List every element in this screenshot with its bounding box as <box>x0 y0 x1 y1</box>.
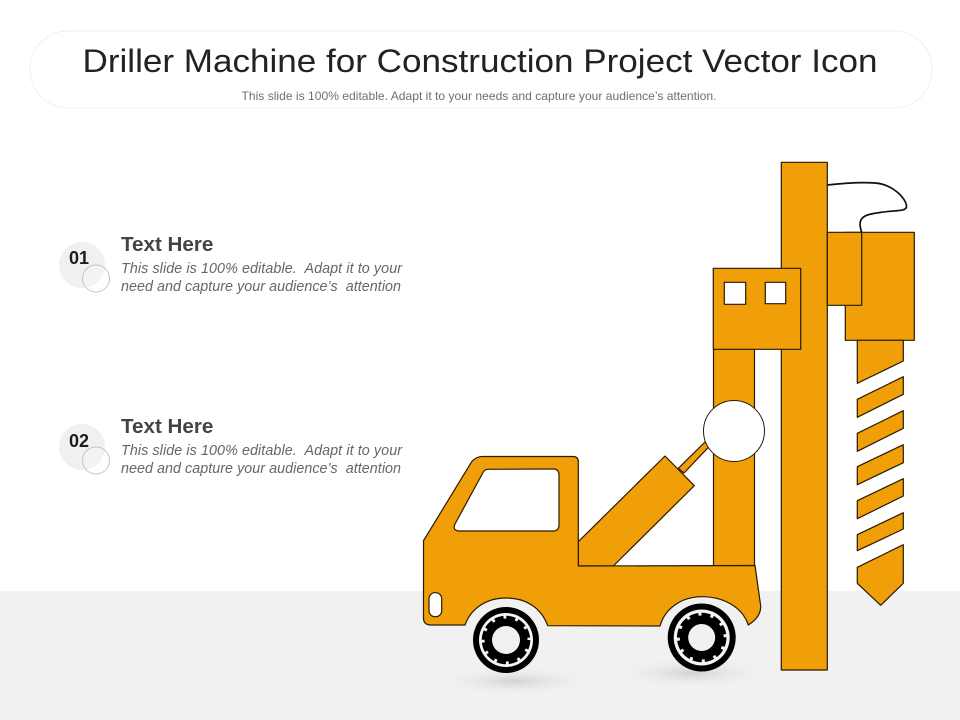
wheel shadows <box>433 657 772 696</box>
motor clamp <box>827 232 862 305</box>
tall mast <box>781 162 827 670</box>
cab window <box>454 469 559 531</box>
number badge 02 <box>59 424 110 474</box>
list item 01 <box>59 233 403 295</box>
number badge 01: 01 <box>69 248 89 268</box>
drill bit <box>857 340 903 605</box>
ground band <box>0 591 960 720</box>
title: Driller Machine for Construction Project Vector Icon <box>82 43 878 79</box>
heading 02: Text Here <box>121 415 213 438</box>
subtitle: This slide is 100% editable. Adapt it to your needs and capture your audience’s attention. <box>242 89 716 103</box>
drill motor housing <box>845 232 914 340</box>
pivot circle <box>704 400 764 462</box>
number badge 02: 02 <box>69 431 89 451</box>
heading 01: Text Here <box>121 233 213 256</box>
box windows <box>724 282 786 304</box>
description 01: This slide is 100% editable. Adapt it to your <box>121 261 403 277</box>
list item 02 <box>59 415 403 477</box>
header pill outline <box>30 31 932 108</box>
drill cable <box>827 183 907 232</box>
truck body <box>424 456 761 626</box>
number badge 01 <box>59 242 110 292</box>
hydraulic cylinder <box>578 456 694 566</box>
header <box>30 31 932 108</box>
description 01: need and capture your audience’s attention <box>121 279 401 295</box>
description 02: need and capture your audience’s attention <box>121 461 401 477</box>
headlight <box>429 593 442 617</box>
front wheel <box>473 607 539 673</box>
operator box <box>713 268 801 349</box>
support column <box>714 349 754 566</box>
description 02: This slide is 100% editable. Adapt it to your <box>121 443 403 459</box>
hydraulic rod <box>678 442 709 473</box>
driller machine illustration <box>424 162 914 696</box>
rear wheel <box>668 604 736 672</box>
